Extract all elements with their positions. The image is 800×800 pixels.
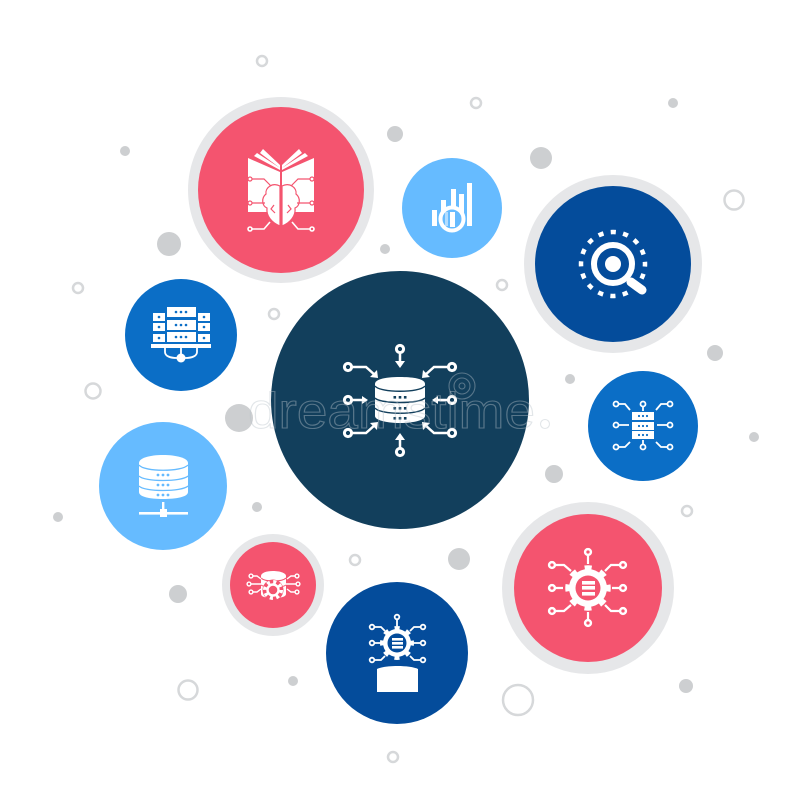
- decorative ring dots: [73, 56, 744, 762]
- panel: data search bubble: [524, 175, 702, 353]
- panel: central database bubble: [271, 271, 529, 529]
- icon: gear with circuits above warehouse: [370, 615, 425, 692]
- icon: server racks on platform: [151, 307, 211, 362]
- watermark: dreamstime: [248, 383, 535, 439]
- icon: bar chart with magnifier: [432, 183, 472, 230]
- panel: server circuit bubble: [588, 371, 698, 481]
- panel: gear data bubble: [502, 502, 674, 674]
- icon: magnifier with dashed circle: [581, 232, 645, 296]
- icon: book with brain: [248, 149, 314, 231]
- panel: data warehouse bubble: [326, 582, 468, 724]
- icon: gear with server and circuits: [549, 549, 626, 626]
- panel: analytics bubble: [402, 158, 502, 258]
- icon: database with incoming arrows: [344, 345, 456, 456]
- icon: database on network: [139, 455, 188, 517]
- decorative gray dots: [53, 98, 759, 693]
- icon: database with gear: [247, 571, 300, 600]
- panel: network database bubble: [99, 422, 227, 550]
- icon: server with circuit nodes: [614, 402, 672, 450]
- panel: server network bubble: [125, 279, 237, 391]
- panel: database settings bubble: [222, 534, 324, 636]
- panel: brain and book bubble: [188, 97, 374, 283]
